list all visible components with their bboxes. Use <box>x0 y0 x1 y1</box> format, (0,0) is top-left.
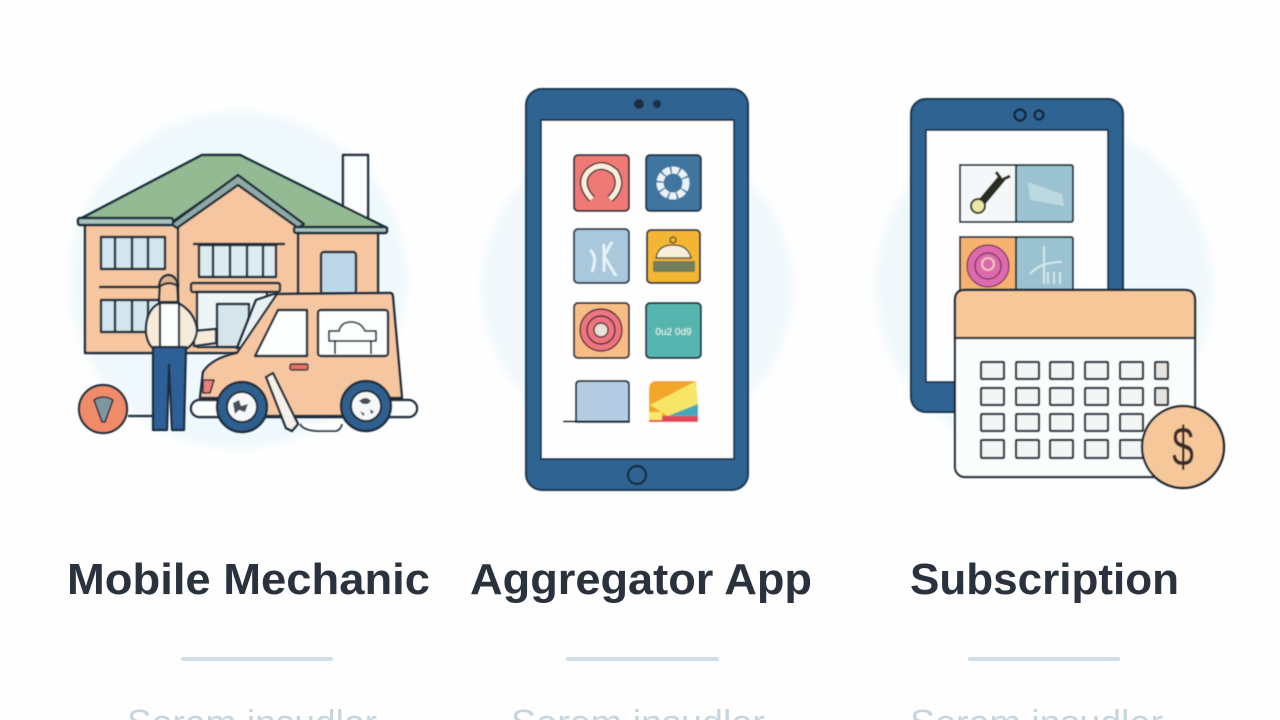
tablet screen <box>926 130 1108 382</box>
upper left window <box>101 237 165 269</box>
calendar day cells <box>981 362 1168 458</box>
heading: Mobile Mechanic <box>67 555 430 604</box>
heading: Subscription <box>910 555 1179 604</box>
tile: teal sketch <box>1016 165 1073 222</box>
background circle <box>70 112 406 448</box>
illustration: tablet <box>911 99 1123 412</box>
app icon: teal <box>646 303 701 358</box>
small tool badge <box>79 385 153 433</box>
app icon: teal: 0u2 0d9 <box>655 327 692 338</box>
van body <box>200 293 402 416</box>
app icon: rainbow tile <box>649 381 698 422</box>
chimney <box>343 155 368 220</box>
tablet body <box>911 99 1123 412</box>
rear wheel <box>341 381 391 431</box>
phone screen <box>541 120 734 459</box>
arms and shirt <box>146 303 197 349</box>
illustration: van <box>191 293 417 432</box>
bumper pill <box>191 400 417 417</box>
app icon: target <box>574 303 629 358</box>
app icon: yellow bell <box>647 230 700 283</box>
wrench tool <box>266 373 298 431</box>
home button <box>628 466 646 484</box>
heading: Aggregator App <box>470 555 812 604</box>
app icon: light blue <box>574 229 629 283</box>
lower left window <box>101 300 165 332</box>
panel: aggregator app <box>470 89 812 720</box>
right wall <box>298 233 378 295</box>
head <box>159 278 178 302</box>
cable <box>300 424 342 431</box>
porch canopy <box>191 283 280 292</box>
divider <box>566 657 719 661</box>
tile: wrench <box>960 165 1016 222</box>
illustration: calendar <box>955 290 1224 488</box>
trousers <box>153 347 186 430</box>
right eave <box>294 227 387 233</box>
app icon: red <box>574 155 629 211</box>
tablet cameras <box>1014 110 1044 120</box>
green roof <box>78 155 387 228</box>
centre gabled wall <box>178 178 298 353</box>
open hood <box>237 293 277 348</box>
illustration: phone <box>526 89 748 490</box>
illustration: house <box>78 155 387 353</box>
floor band <box>99 286 160 288</box>
panel: subscription <box>876 99 1224 720</box>
app icon: blank tile <box>563 381 629 422</box>
torso <box>160 303 179 348</box>
tile: spiral <box>960 237 1016 291</box>
tail light <box>203 380 214 393</box>
app icon: blue gear <box>646 155 701 211</box>
panel: mobile mechanic <box>67 112 430 720</box>
divider <box>968 657 1120 661</box>
tile: teal chart <box>1016 237 1073 291</box>
rear window with cargo <box>318 310 388 356</box>
divider <box>181 657 333 661</box>
background circle <box>482 133 792 443</box>
dollar coin: $ <box>1172 415 1194 478</box>
calendar page <box>955 290 1195 477</box>
porch and door <box>197 292 267 347</box>
calendar header <box>955 290 1195 338</box>
phone body <box>526 89 748 490</box>
forearm <box>194 329 216 346</box>
dollar coin <box>1142 406 1224 488</box>
windshield <box>255 310 307 356</box>
illustration: mechanic <box>146 275 216 430</box>
door handle <box>290 364 308 370</box>
centre balcony window <box>193 244 285 277</box>
hair <box>159 275 178 287</box>
front wheel <box>217 382 267 432</box>
left wall <box>85 225 179 353</box>
left eave <box>78 218 173 225</box>
gable trim <box>171 175 304 228</box>
background circle <box>876 117 1212 453</box>
front camera <box>634 99 661 109</box>
blue side window <box>321 252 356 294</box>
